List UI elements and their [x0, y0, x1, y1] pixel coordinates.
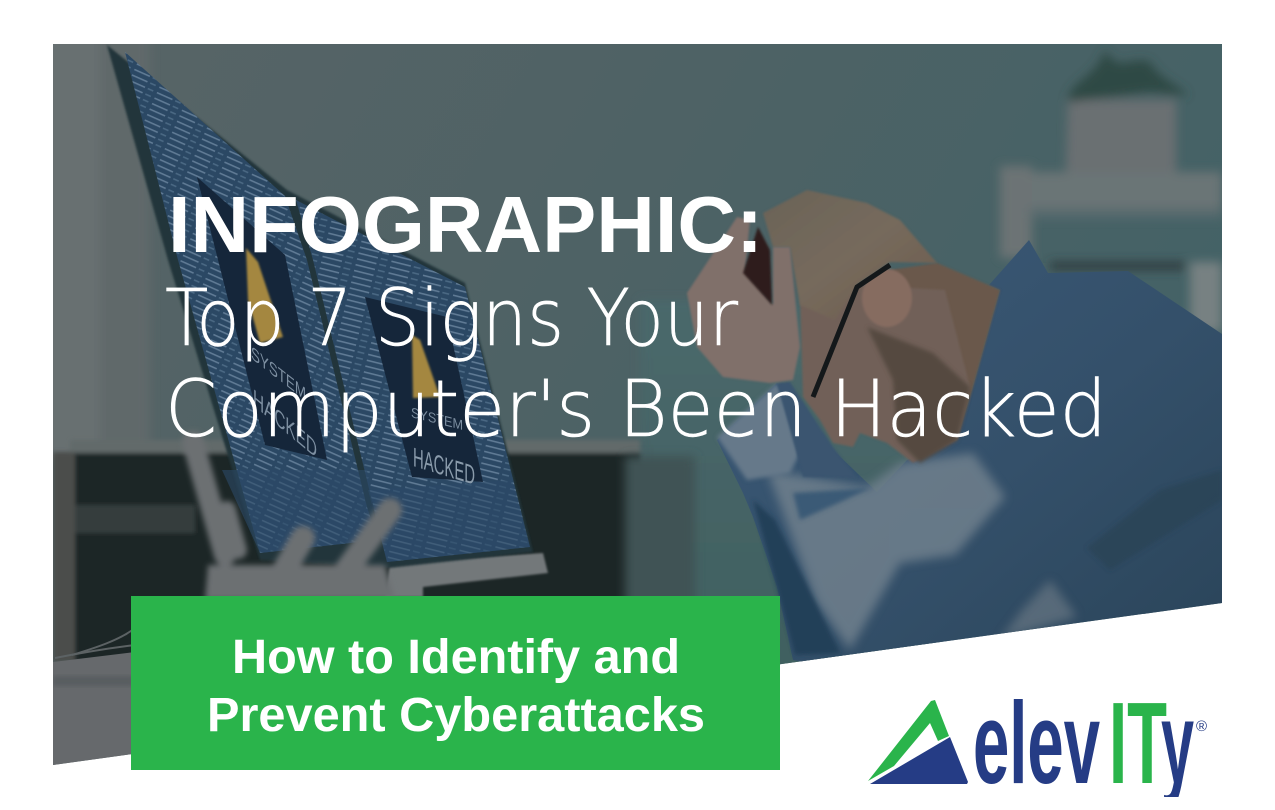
title: infographic: INFOGRAPHIC:	[168, 180, 763, 269]
logo: elevITy: y	[1161, 678, 1194, 808]
left window column	[53, 44, 148, 454]
logo: elevITy: elev	[973, 678, 1100, 808]
sleeve shadows	[753, 470, 1222, 655]
callout: green banner	[131, 596, 780, 770]
callout: green banner: How to Identify and	[232, 631, 680, 684]
icon: mountain mark	[868, 700, 968, 784]
subtitle: Computer's Been Hacked	[165, 365, 1107, 455]
cables	[55, 628, 135, 658]
dual monitors: SYSTEM	[251, 342, 306, 405]
logo: elevITy: ®	[1196, 718, 1207, 735]
subtitle: Top 7 Signs Your	[165, 274, 738, 364]
glasses	[813, 265, 890, 397]
shelf and plant	[1000, 50, 1222, 332]
logo: elevITy: IT	[1109, 678, 1167, 808]
logo: elevITy	[868, 699, 1207, 797]
hair	[763, 190, 936, 305]
ear	[862, 269, 912, 327]
hand on head	[687, 217, 800, 383]
blurred hand	[193, 442, 395, 600]
lower teal wall	[780, 642, 940, 664]
wrist cuff	[717, 382, 840, 482]
neck	[890, 263, 1000, 440]
monitor stand	[385, 553, 548, 597]
shirt	[717, 240, 1222, 670]
desk surface	[53, 652, 135, 770]
desk shelf in background	[53, 440, 640, 663]
sleeve highlights	[767, 453, 1077, 650]
dual monitors: HACKED	[253, 383, 317, 464]
beard	[867, 327, 970, 463]
dual monitors: HACKED	[413, 442, 475, 491]
dual monitors: SYSTEM	[411, 405, 463, 434]
face	[800, 285, 970, 463]
callout: green banner: Prevent Cyberattacks	[207, 689, 705, 742]
dual monitors	[107, 45, 533, 568]
subtitle	[165, 274, 1107, 455]
